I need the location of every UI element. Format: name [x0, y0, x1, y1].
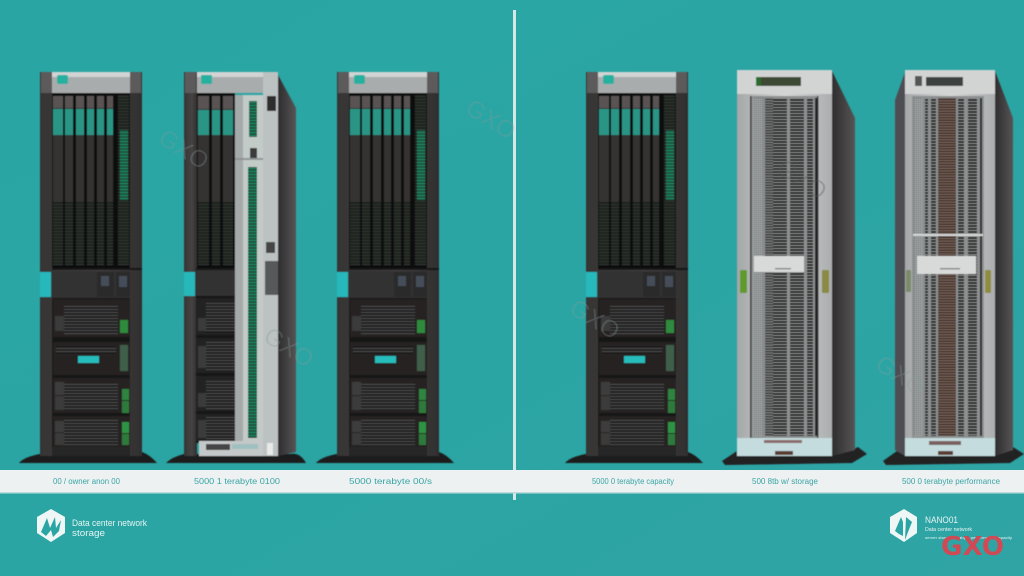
- logo text: storage: [72, 528, 105, 538]
- server tower 1: [19, 72, 157, 463]
- logo text: [72, 518, 147, 538]
- label bar: [0, 470, 1024, 494]
- server tower 5: [722, 70, 867, 465]
- center divider line: [513, 10, 516, 500]
- label 6: 500 0 terabyte performance: [902, 477, 1001, 486]
- label 3: 5000 terabyte 00/s: [349, 477, 432, 486]
- watermarks: GXO: [259, 322, 318, 373]
- label 4: 5000 0 terabyte capacity: [592, 477, 674, 486]
- logo text: Data center network: [72, 518, 147, 528]
- server tower 6: [883, 70, 1024, 465]
- server tower 2: [166, 72, 306, 463]
- logo text: [925, 515, 1012, 540]
- watermarks: GXO: [772, 154, 831, 205]
- icon: hexagon logo: [37, 509, 65, 542]
- icon: hexagon logo: [890, 509, 917, 542]
- watermarks: GXO: [871, 350, 930, 401]
- logo text: Data center network: [925, 527, 973, 533]
- server tower 3: [316, 72, 454, 463]
- left logo: [37, 509, 147, 542]
- server tower 4: [565, 72, 703, 463]
- watermarks: [154, 94, 930, 401]
- watermarks: GXO: [154, 124, 213, 175]
- label 2: 5000 1 terabyte 0100: [194, 477, 281, 486]
- red GXO mark: GXO: [941, 532, 1004, 562]
- logo text: NANO01: [925, 515, 958, 525]
- label 1: 00 / owner anon 00: [53, 477, 121, 486]
- watermarks: GXO: [461, 94, 520, 145]
- logo text: server storage terabyte performance capacity: [925, 535, 1012, 540]
- right logo: [890, 509, 1012, 542]
- watermarks: GXO: [565, 294, 624, 345]
- label 5: 500 8tb w/ storage: [752, 477, 819, 486]
